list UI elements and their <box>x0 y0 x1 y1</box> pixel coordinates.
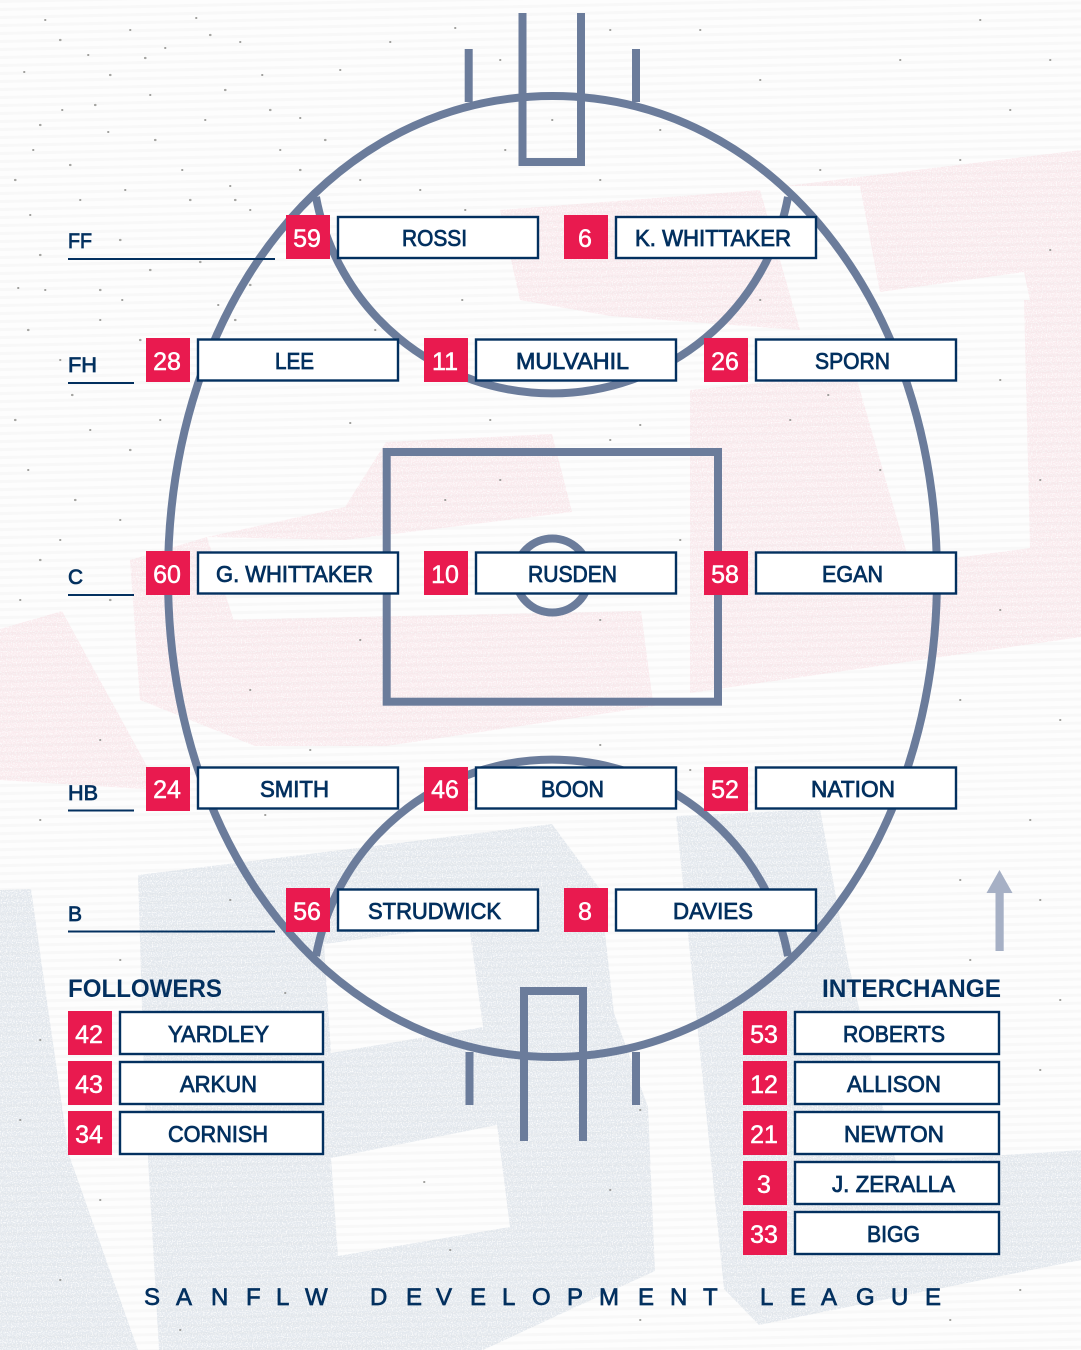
player: 58 EGAN: EGAN <box>822 561 883 587</box>
player: 59 ROSSI: ROSSI <box>402 225 467 251</box>
player: 6 K. WHITTAKER <box>564 215 816 259</box>
player: 6 K. WHITTAKER: 6 <box>578 225 592 253</box>
player: 24 SMITH <box>146 767 398 811</box>
line label: B: B <box>68 903 82 926</box>
player: 21 NEWTON: 21 <box>750 1121 778 1149</box>
player: 46 BOON: BOON <box>541 776 604 802</box>
bottom goal square and posts <box>470 991 636 1141</box>
player: 46 BOON <box>424 767 676 811</box>
player: 3 J. ZERALLA: J. ZERALLA <box>832 1171 956 1197</box>
player: 46 BOON: 46 <box>431 776 459 804</box>
forward fifty arc <box>316 197 788 393</box>
player: 60 G. WHITTAKER: 60 <box>153 561 181 589</box>
player: 21 NEWTON: NEWTON <box>844 1121 944 1147</box>
arrow: direction of play <box>986 870 1012 951</box>
player: 58 EGAN: 58 <box>711 561 739 589</box>
player: 26 SPORN: SPORN <box>815 348 890 374</box>
line label: C: C <box>68 566 83 589</box>
player: 3 J. ZERALLA: 3 <box>757 1171 771 1199</box>
player: 34 CORNISH: 34 <box>75 1121 103 1149</box>
panel: followers <box>68 975 323 1155</box>
extra dense specks top left <box>15 35 340 600</box>
player: 11 MULVAHIL <box>424 338 676 382</box>
player: 53 ROBERTS <box>743 1011 999 1055</box>
footer title: SANFLW DEVELOPMENT LEAGUE <box>144 1284 941 1311</box>
player: 8 DAVIES: 8 <box>578 898 592 926</box>
player: 53 ROBERTS: ROBERTS <box>843 1021 945 1047</box>
line label: FH: FH <box>68 354 97 377</box>
player: 26 SPORN <box>704 338 956 382</box>
player: 12 ALLISON: ALLISON <box>847 1071 941 1097</box>
player: 28 LEE: LEE <box>275 348 314 374</box>
player: 42 YARDLEY: 42 <box>75 1021 103 1049</box>
player: 52 NATION: NATION <box>811 776 895 802</box>
panel: interchange <box>743 975 1001 1255</box>
player: 8 DAVIES <box>564 888 816 932</box>
top goal square and posts <box>469 13 636 162</box>
player: 42 YARDLEY <box>68 1011 323 1055</box>
player: 11 MULVAHIL: 11 <box>432 348 458 376</box>
player: 34 CORNISH: CORNISH <box>168 1121 268 1147</box>
line label: HB: HB <box>68 782 98 805</box>
player: 52 NATION <box>704 767 956 811</box>
player: 58 EGAN <box>704 551 956 595</box>
line label: C <box>68 566 134 596</box>
player: 24 SMITH: SMITH <box>260 776 329 802</box>
player: 43 ARKUN: ARKUN <box>180 1071 257 1097</box>
oval boundary <box>168 96 937 1057</box>
player: 21 NEWTON <box>743 1111 999 1155</box>
player: 12 ALLISON <box>743 1061 999 1105</box>
player: 6 K. WHITTAKER: K. WHITTAKER <box>635 225 791 251</box>
pale red background lettering <box>0 150 1081 790</box>
player: 28 LEE: 28 <box>153 348 181 376</box>
player: 56 STRUDWICK: STRUDWICK <box>368 898 502 924</box>
player: 11 MULVAHIL: MULVAHIL <box>516 348 629 374</box>
player: 53 ROBERTS: 53 <box>750 1021 778 1049</box>
player: 10 RUSDEN <box>424 551 676 595</box>
player: 43 ARKUN <box>68 1061 323 1105</box>
player: 34 CORNISH <box>68 1111 323 1155</box>
player: 8 DAVIES: DAVIES <box>673 898 753 924</box>
centre square <box>387 452 718 702</box>
back fifty arc <box>316 760 788 956</box>
player: 10 RUSDEN: RUSDEN <box>528 561 617 587</box>
player: 33 BIGG: 33 <box>750 1221 778 1249</box>
centre circle <box>515 538 589 612</box>
heading: interchange: INTERCHANGE <box>822 975 1001 1003</box>
player: 43 ARKUN: 43 <box>75 1071 103 1099</box>
player: 26 SPORN: 26 <box>711 348 739 376</box>
player: 33 BIGG: BIGG <box>867 1221 920 1247</box>
player: 52 NATION: 52 <box>711 776 739 804</box>
player: 28 LEE <box>146 338 398 382</box>
player: 56 STRUDWICK: 56 <box>293 898 321 926</box>
heading: followers: FOLLOWERS <box>68 975 222 1003</box>
line label: FH <box>68 354 134 384</box>
pale blue background lettering <box>0 809 1081 1350</box>
player: 24 SMITH: 24 <box>153 776 181 804</box>
player: 12 ALLISON: 12 <box>750 1071 778 1099</box>
player: 60 G. WHITTAKER <box>146 551 398 595</box>
line label: FF: FF <box>68 230 92 253</box>
player: 56 STRUDWICK <box>286 888 538 932</box>
player: 42 YARDLEY: YARDLEY <box>168 1021 269 1047</box>
player: 33 BIGG <box>743 1211 999 1255</box>
line label: HB <box>68 782 134 812</box>
player: 3 J. ZERALLA <box>743 1161 999 1205</box>
football oval field diagram <box>168 13 937 1141</box>
player: 10 RUSDEN: 10 <box>431 561 459 589</box>
player: 59 ROSSI: 59 <box>293 225 321 253</box>
player: 60 G. WHITTAKER: G. WHITTAKER <box>216 561 373 587</box>
player: 59 ROSSI <box>286 215 538 259</box>
